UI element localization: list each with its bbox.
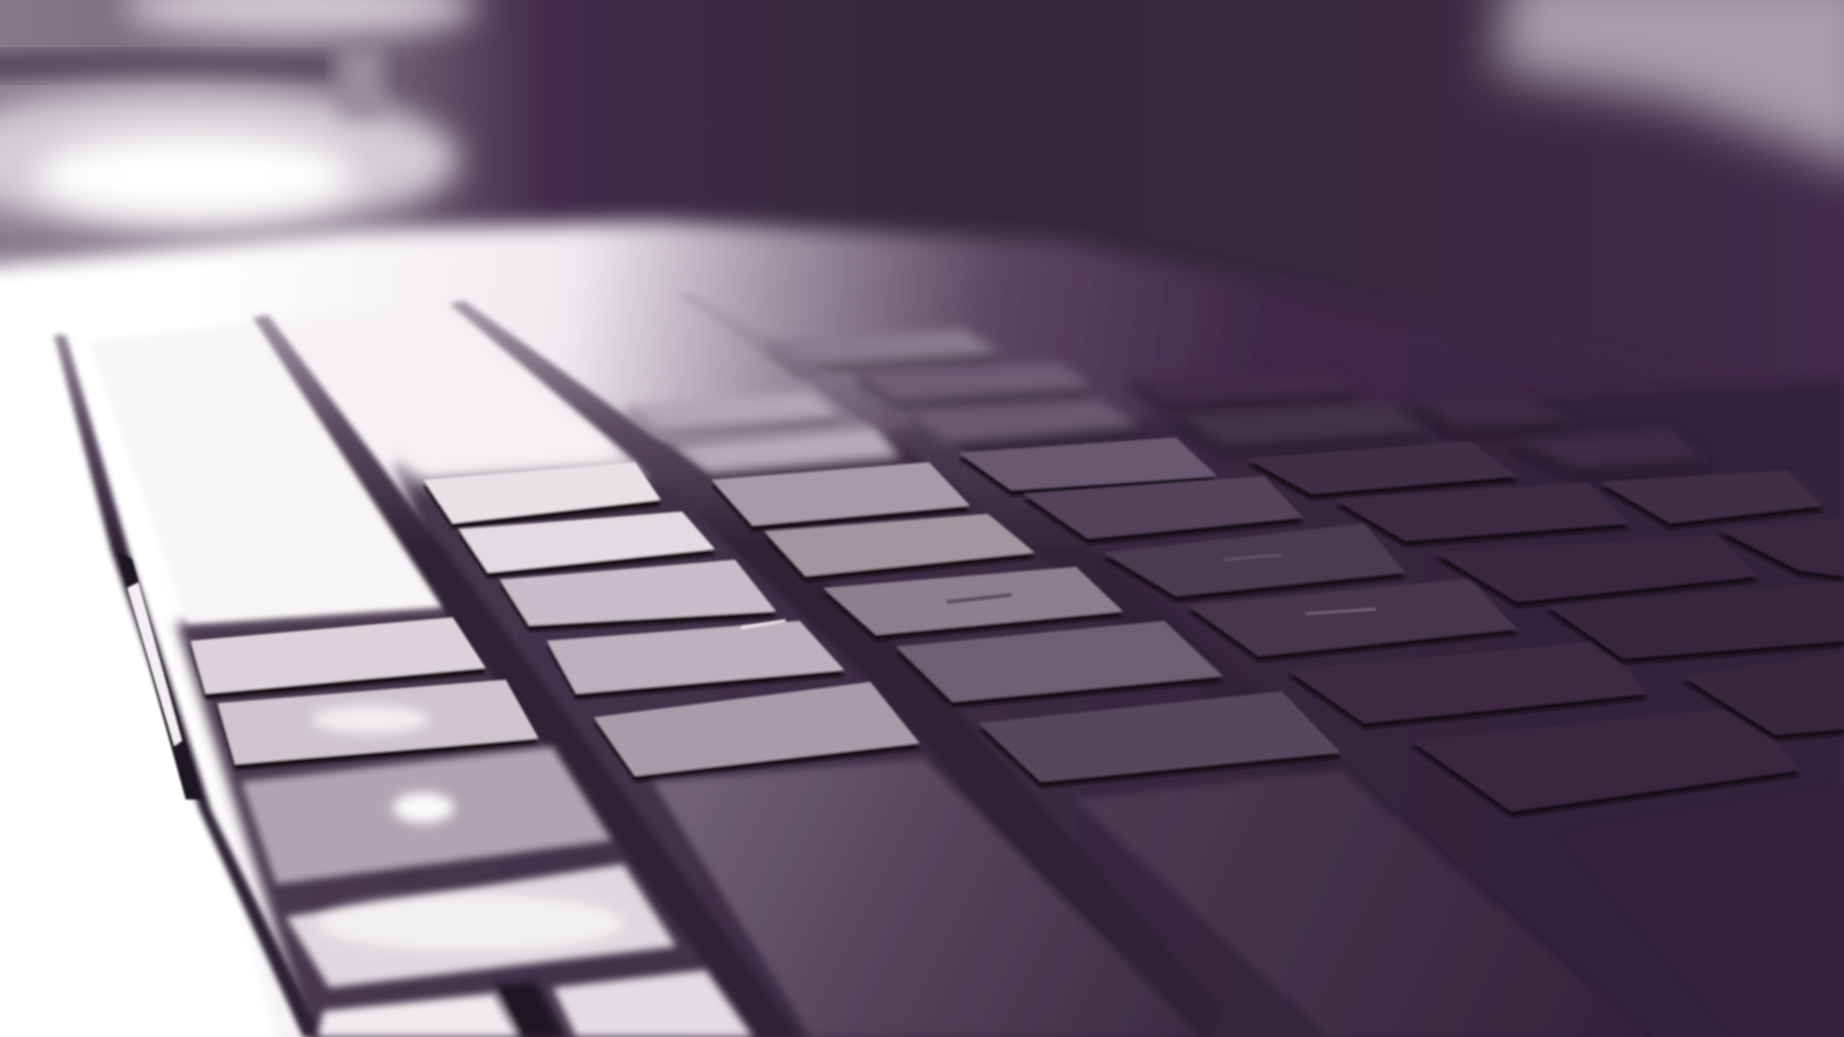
- keys: blurred foreground: [241, 747, 1844, 1037]
- highlights on keys: [312, 705, 623, 951]
- keyboard grooves: [54, 294, 1646, 1037]
- keys: in-focus rows: [191, 437, 1844, 811]
- keys: column 4: [958, 437, 1799, 811]
- distant key rows: [400, 329, 1705, 473]
- keys: column 1: [191, 617, 539, 764]
- key well: [176, 382, 1844, 1037]
- keys: column 6: [1599, 470, 1844, 576]
- keys: column 3: [711, 462, 1341, 782]
- white long key: [88, 323, 445, 623]
- keys: column 2: [423, 462, 920, 776]
- laptop deck: [0, 221, 1844, 1037]
- white foreground table edge: [0, 282, 282, 1037]
- keys: column 5: [1247, 441, 1844, 735]
- key scuffs: [741, 555, 1376, 628]
- side port slot: [118, 553, 202, 800]
